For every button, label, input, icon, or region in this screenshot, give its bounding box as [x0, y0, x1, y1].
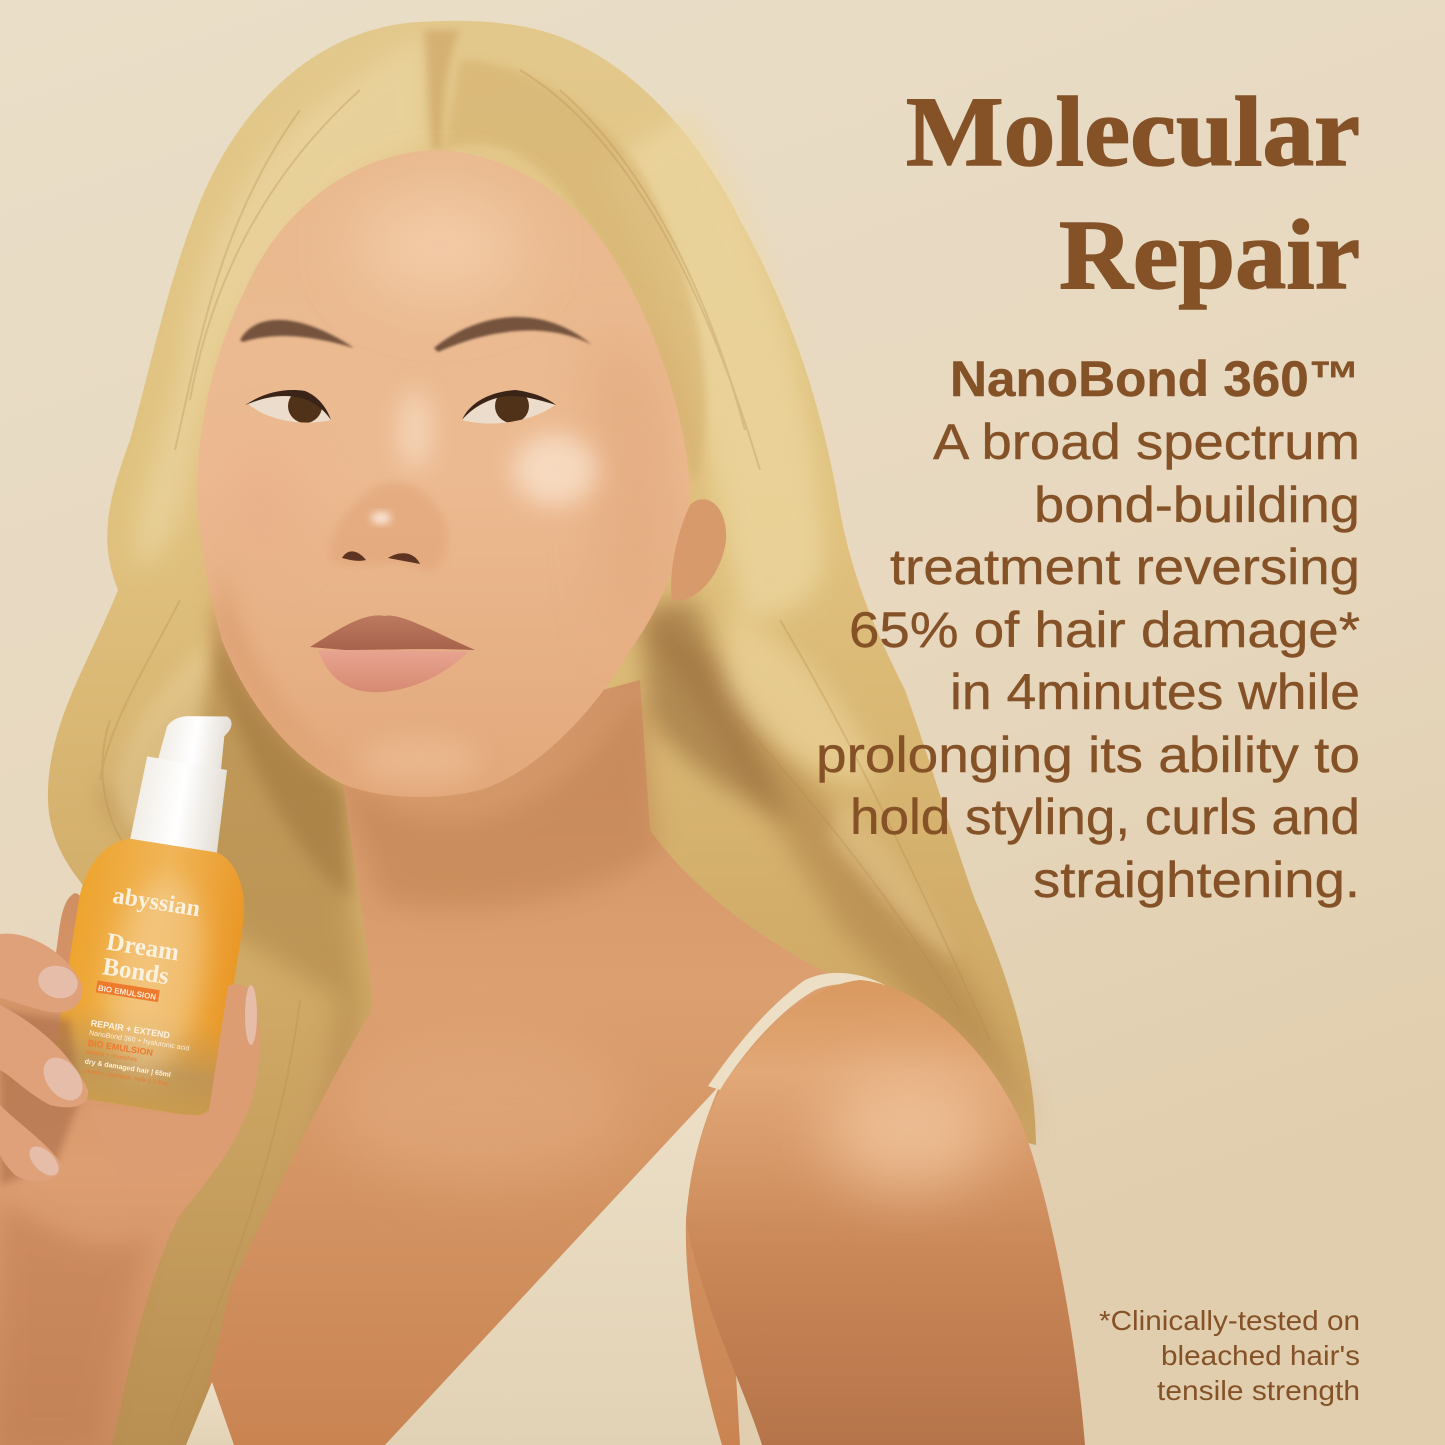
product name: Dream — [105, 929, 181, 967]
nose — [330, 482, 448, 572]
body text: treatment reversing — [890, 539, 1360, 595]
fingers — [0, 934, 259, 1185]
title — [906, 76, 1360, 310]
product badge: BIO EMULSION — [97, 984, 157, 1002]
lips — [310, 615, 475, 692]
footnote: *Clinically-tested on — [1099, 1305, 1360, 1336]
title: Repair — [1059, 199, 1360, 310]
footnote: bleached hair's — [1161, 1340, 1360, 1371]
body text: NanoBond 360™ — [950, 351, 1360, 407]
product details: dry & damaged hair | 65ml — [84, 1058, 171, 1079]
product details: repairs + nourishes — [86, 1050, 137, 1063]
shoulder highlight — [825, 1070, 995, 1190]
garment: cream top — [186, 973, 942, 1445]
body text: straightening. — [1033, 852, 1360, 908]
body text: hold styling, curls and — [850, 789, 1360, 845]
footnote: tensile strength — [1157, 1375, 1360, 1406]
product details: BIO EMULSION — [87, 1038, 154, 1058]
forehead highlight — [355, 190, 525, 300]
neck and chest — [208, 680, 840, 1445]
body text: in 4minutes while — [950, 664, 1360, 720]
footnote — [1099, 1305, 1360, 1406]
bottle body: Bonds — [101, 953, 171, 990]
neck shadow — [345, 690, 660, 909]
pump — [130, 704, 238, 854]
body text — [816, 351, 1360, 908]
body text: bond-building — [1034, 477, 1360, 533]
cheek highlight — [513, 434, 597, 506]
shoulder — [686, 980, 1085, 1445]
bottle body — [48, 832, 254, 1119]
product details: cleanse, condition, style 2.2 fl oz — [83, 1068, 169, 1088]
product details: REPAIR + EXTEND — [90, 1018, 171, 1040]
product details — [83, 1018, 192, 1090]
body text: 65% of hair damage* — [849, 602, 1360, 658]
bottle — [48, 698, 275, 1119]
hand — [0, 893, 240, 1445]
product details: NanoBond 360 + hyaluronic acid — [89, 1030, 190, 1053]
title: Molecular — [906, 76, 1360, 187]
brand: abyssian — [111, 883, 202, 922]
left eye — [245, 389, 331, 423]
face — [197, 150, 726, 797]
ear — [671, 499, 726, 601]
body text: prolonging its ability to — [816, 727, 1360, 783]
chest highlight — [330, 1035, 630, 1185]
body text: A broad spectrum — [933, 414, 1360, 470]
right eye — [462, 389, 556, 424]
hair — [48, 21, 1036, 1445]
photo: woman with blonde hair — [0, 21, 1085, 1445]
dark hair behind ear — [640, 599, 790, 820]
eyebrows — [240, 320, 354, 348]
